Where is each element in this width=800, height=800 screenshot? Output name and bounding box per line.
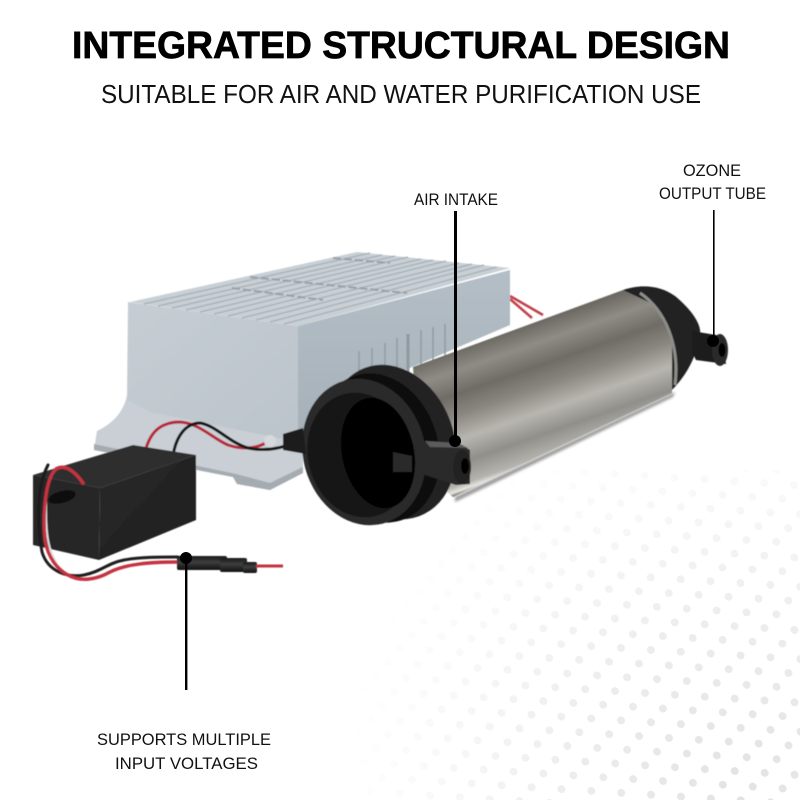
back end cap: [623, 286, 700, 392]
inner chamber: [331, 391, 425, 515]
callout: supports multiple input voltages: INPUT VOLTAGES: [115, 755, 258, 773]
rim: [286, 365, 442, 539]
vent slots: [359, 324, 445, 372]
callout: ozone output tube: [659, 162, 766, 347]
red wires behind heat sink: [510, 296, 543, 318]
background dot pattern: [459, 510, 800, 800]
right side face: [298, 270, 510, 442]
ozone chamber tube: [283, 286, 728, 539]
callout: air intake: [414, 191, 498, 447]
black power supply box: [33, 445, 196, 560]
callout: supports multiple input voltages: [97, 552, 271, 773]
ozone generator module with heat sink: [94, 252, 510, 490]
subtitle: SUITABLE FOR AIR AND WATER PURIFICATION USE: [101, 79, 701, 109]
tube shadow: [455, 392, 675, 502]
small bracket: [393, 452, 412, 472]
callout: ozone output tube: OZONE: [683, 162, 741, 180]
title: INTEGRATED STRUCTURAL DESIGN: [72, 25, 730, 67]
mounting tab: [47, 488, 77, 506]
cables between battery box and module: [145, 422, 296, 456]
front face: [127, 302, 298, 442]
callout: air intake: AIR INTAKE: [414, 191, 498, 209]
air intake connector: [418, 441, 471, 485]
product illustration: [33, 252, 728, 579]
output connector: [692, 331, 728, 366]
base plate: [94, 395, 303, 490]
front flange: [307, 347, 477, 537]
seams on top face: [232, 258, 407, 300]
heat sink fins: [144, 253, 497, 324]
callout: ozone output tube: OUTPUT TUBE: [659, 185, 766, 203]
input cables: [39, 465, 178, 579]
tab to module: [283, 428, 306, 454]
glass ring: [640, 293, 676, 385]
opening: [293, 381, 427, 529]
inline connector: [177, 556, 283, 573]
box front: [33, 475, 100, 560]
box side: [99, 455, 196, 560]
finned top face: [130, 252, 510, 326]
metal body: [413, 290, 672, 497]
box top: [33, 445, 196, 488]
callout: supports multiple input voltages: SUPPORTS MULTIPLE: [97, 731, 271, 749]
